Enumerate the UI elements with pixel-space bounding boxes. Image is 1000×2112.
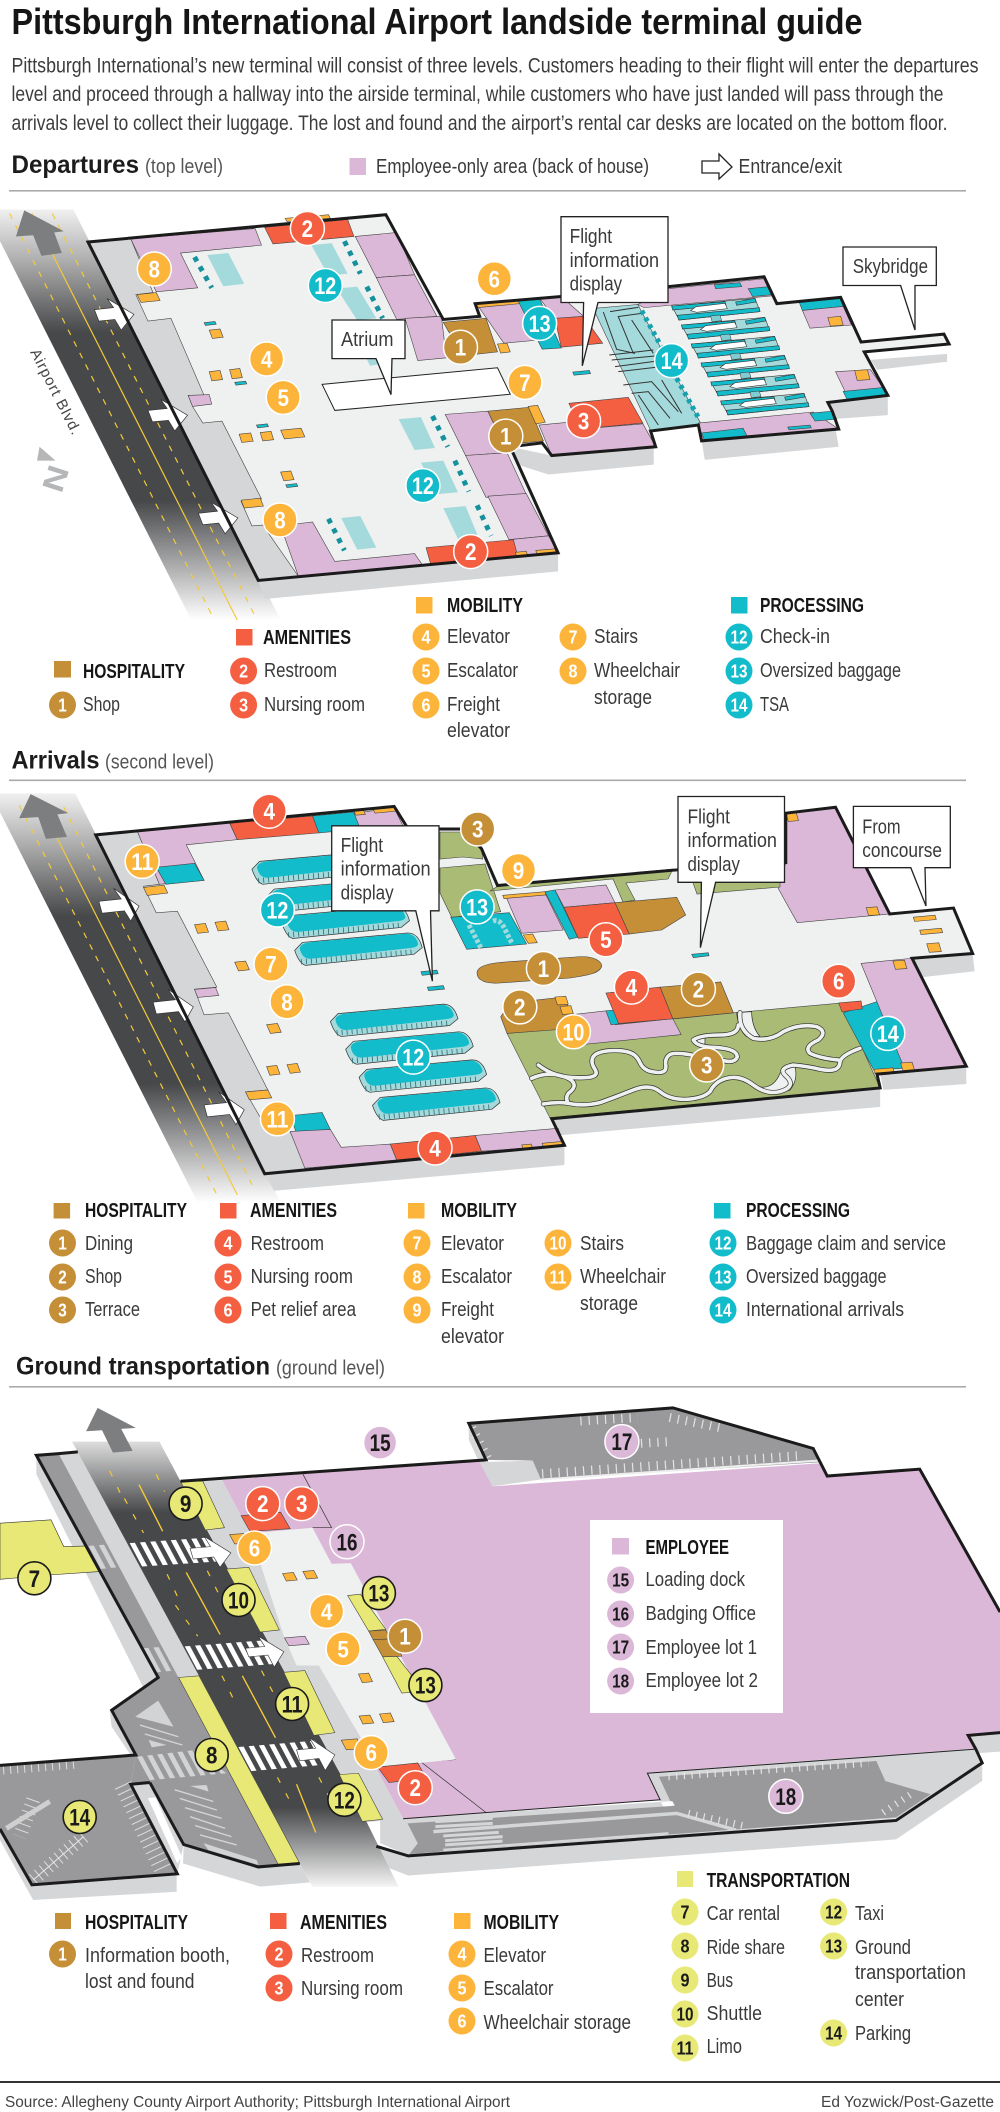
legend group: hospitality: 1: [58, 696, 67, 716]
badge: ride share: [195, 1738, 228, 1772]
key box: employee: 18: [612, 1672, 629, 1692]
legend: arrivals: [49, 1200, 946, 1348]
badge: restroom: [614, 970, 648, 1004]
legend group: hospitality: Information booth,: [85, 1945, 230, 1967]
badge: international arrivals: [871, 1016, 905, 1050]
badge: stairs: [508, 365, 542, 399]
badge: wheelchair storage: 6: [365, 1740, 377, 1767]
badge: ride share: 8: [206, 1742, 217, 1770]
badge: nursing room: 5: [600, 927, 612, 954]
callout: flight information display: [678, 796, 784, 948]
legend group: amenities: Restroom: [301, 1945, 374, 1967]
badge: stairs: 7: [519, 370, 531, 397]
legend group: transportation: 7: [680, 1902, 690, 1922]
legend group: amenities: Nursing room: [251, 1266, 353, 1288]
badge: restroom: 2: [465, 539, 476, 566]
legend group: transportation: 12: [825, 1902, 842, 1922]
callout: atrium: [332, 320, 405, 395]
legend group: transportation: 8: [680, 1936, 690, 1956]
legend group: transportation: transportation: [855, 1962, 966, 1984]
badge: car rental: [18, 1562, 51, 1595]
key box: employee: Employee lot 2: [646, 1670, 758, 1692]
source credit: Source: Allegheny County Airport Authority; Pittsburgh International Airport: [5, 2094, 511, 2111]
badge: wheelchair storage: [137, 252, 171, 286]
legend group: amenities: [214, 1200, 357, 1324]
badge: check-in: [308, 268, 342, 302]
badge: shop: 2: [514, 994, 526, 1021]
heading: arrivals: (second level): [105, 752, 214, 774]
badge: baggage claim: [396, 1040, 430, 1074]
callout: flight information display: [332, 826, 439, 981]
legend group: mobility: Stairs: [594, 626, 638, 648]
badge: elevator: 4: [321, 1599, 333, 1626]
arrivals floor plan: [0, 793, 975, 1203]
legend group: amenities: Restroom: [264, 660, 337, 682]
callout: flight information display: information: [341, 859, 431, 881]
badge: restroom: [418, 1131, 452, 1165]
badge: wheelchair storage: 6: [249, 1536, 260, 1562]
badge: escalator: 5: [337, 1636, 349, 1663]
badge: parking: [63, 1800, 96, 1834]
legend group: amenities: [230, 627, 365, 718]
badge: elevator: 7: [265, 952, 277, 979]
badge: check-in: 12: [412, 473, 434, 500]
key box: employee: 15: [612, 1570, 629, 1590]
badge: employee lot 2: [769, 1779, 803, 1813]
legend group: amenities: Restroom: [251, 1233, 324, 1255]
badge: nursing room: [589, 923, 623, 957]
key box: employee: 16: [612, 1604, 629, 1624]
legend group: amenities: 5: [224, 1268, 232, 1288]
legend group: hospitality: Shop: [85, 1266, 122, 1288]
heading: arrivals: Arrivals: [12, 746, 100, 774]
legend group: amenities: AMENITIES: [300, 1912, 387, 1934]
road label: Airport Blvd.: Airport Blvd.: [26, 346, 84, 438]
badge: ground transportation center: [409, 1669, 442, 1702]
badge: restroom: [398, 1771, 432, 1805]
callout: flight information display: Flight: [341, 835, 383, 857]
legend group: mobility: Elevator: [447, 626, 510, 648]
legend group: mobility: storage: [580, 1293, 638, 1315]
legend group: mobility: MOBILITY: [447, 595, 524, 617]
badge: freight elevator: [502, 854, 536, 888]
legend group: processing: [726, 595, 901, 718]
key: entrance/exit: Entrance/exit: [738, 156, 842, 178]
callout: flight information display: display: [341, 882, 394, 904]
badge: terrace: 3: [472, 816, 483, 844]
badge: pet relief area: [822, 964, 856, 998]
legend group: amenities: 6: [224, 1300, 232, 1320]
legend group: mobility: 6: [458, 2012, 466, 2032]
badge: shop: [503, 990, 537, 1024]
legend group: mobility: 10: [550, 1234, 566, 1254]
legend group: processing: 14: [714, 1300, 732, 1320]
ground floor plan: [0, 1408, 1000, 1900]
badge: restroom: [252, 794, 286, 828]
badge: wheelchair storage: 11: [131, 849, 153, 876]
arrivals building outline: [96, 806, 973, 1174]
badge: restroom: 2: [302, 216, 313, 243]
badge: restroom: 4: [626, 975, 638, 1002]
legend group: amenities: Nursing room: [301, 1978, 403, 2000]
key box: employee: EMPLOYEE: [646, 1537, 729, 1559]
legend group: amenities: 2: [239, 662, 248, 682]
legend group: hospitality: [49, 661, 186, 718]
legend group: mobility: [404, 1200, 666, 1348]
legend group: transportation: Bus: [707, 1970, 733, 1992]
legend group: mobility: Stairs: [580, 1233, 624, 1255]
legend group: hospitality: [49, 1912, 230, 1993]
callout: flight information display: information: [570, 250, 659, 272]
badge: employee lot 2: 18: [775, 1784, 796, 1811]
legend group: mobility: MOBILITY: [441, 1200, 518, 1222]
title: Pittsburgh International Airport landside terminal guide: [12, 1, 862, 42]
legend group: transportation: 10: [676, 2004, 694, 2024]
legend group: hospitality: Terrace: [85, 1299, 140, 1321]
callout: flight information display: [561, 217, 668, 366]
legend group: mobility: Escalator: [447, 660, 518, 682]
heading: ground transportation: Ground transportation: [16, 1352, 270, 1380]
key: employee-only area: Employee-only area (back of house): [376, 156, 649, 178]
legend group: mobility: Wheelchair: [594, 660, 680, 682]
badge: shuttle: 10: [228, 1588, 249, 1614]
key box: employee: 17: [612, 1638, 629, 1658]
badge: elevator: 4: [261, 346, 273, 374]
badge: terrace: 3: [701, 1052, 712, 1080]
legend group: mobility: Elevator: [441, 1233, 504, 1255]
legend group: transportation: Limo: [707, 2036, 742, 2058]
legend group: mobility: MOBILITY: [484, 1912, 560, 1934]
badge: terrace: [461, 812, 495, 846]
legend group: processing: 12: [730, 628, 748, 648]
badge: restroom: 4: [429, 1136, 441, 1162]
badge: restroom: 2: [409, 1775, 421, 1802]
badge: oversized baggage: [523, 306, 557, 340]
badge: loading dock: [364, 1426, 397, 1459]
callout: flight information display: display: [688, 854, 740, 876]
panel: arrivals map: [0, 793, 975, 1203]
badge: information booth: 1: [399, 1624, 411, 1651]
badge: wheelchair storage: 11: [266, 1106, 288, 1133]
badge: ground transportation center: 13: [368, 1581, 389, 1608]
central concessions and upper terrace block: [440, 832, 780, 983]
legend group: hospitality: 3: [58, 1300, 67, 1320]
badge: restroom: [454, 535, 488, 569]
legend group: hospitality: 2: [58, 1268, 67, 1288]
legend group: mobility: Escalator: [484, 1978, 554, 2000]
callout: flight information display: Flight: [688, 806, 730, 828]
legend group: mobility: 4: [422, 628, 430, 648]
badge: restroom: 4: [263, 799, 276, 826]
badge: dining: [526, 952, 560, 986]
badge: nursing room: [285, 1487, 319, 1521]
legend group: transportation: 13: [825, 1936, 842, 1956]
badge: baggage claim: [260, 893, 294, 927]
legend group: transportation: 11: [676, 2038, 694, 2058]
terrace walking paths: [532, 1012, 860, 1105]
legend group: hospitality: [49, 1200, 188, 1324]
badge: badging office: 16: [336, 1529, 358, 1556]
badge: restroom: 2: [257, 1491, 269, 1518]
legend group: mobility: Freight: [447, 694, 500, 716]
legend group: transportation: Ride share: [707, 1937, 785, 1959]
badge: ground transportation center: 13: [415, 1673, 436, 1700]
legend group: transportation: center: [855, 1989, 904, 2011]
legend group: transportation: TRANSPORTATION: [707, 1870, 850, 1892]
callout: from concourse: concourse: [862, 840, 942, 862]
legend group: amenities: 2: [274, 1944, 284, 1964]
badge: elevator: [254, 947, 288, 981]
panel: departures map: [0, 210, 949, 620]
legend group: mobility: Freight: [441, 1299, 494, 1321]
badge: loading dock: 15: [370, 1430, 391, 1457]
badge: information booth: [388, 1619, 422, 1653]
legend group: mobility: Wheelchair: [580, 1266, 666, 1288]
badge: shop: 1: [455, 335, 466, 362]
badge: baggage claim: 12: [402, 1045, 424, 1072]
heading: arrivals: [12, 746, 214, 774]
badge: escalator: [326, 1632, 360, 1666]
legend group: hospitality: Dining: [85, 1233, 133, 1255]
badge: elevator: [250, 342, 284, 376]
TSA checkpoint lanes: [603, 298, 809, 425]
legend group: processing: PROCESSING: [760, 595, 864, 617]
legend group: transportation: Taxi: [855, 1903, 884, 1925]
legend group: mobility: 9: [412, 1300, 422, 1320]
badge: shop: 1: [500, 424, 512, 451]
badge: freight elevator: 6: [489, 266, 500, 293]
legend group: hospitality: Shop: [83, 694, 120, 716]
legend group: transportation: 9: [680, 1970, 690, 1990]
byline: Ed Yozwick/Post-Gazette: [821, 2094, 994, 2111]
badge: shop: [681, 972, 715, 1006]
badge: car rental: 7: [29, 1566, 40, 1593]
badge: check-in: [406, 469, 440, 503]
legend group: amenities: AMENITIES: [250, 1200, 337, 1222]
callout: flight information display: display: [570, 274, 622, 296]
badge: restroom: [246, 1487, 280, 1521]
legend group: hospitality: 1: [58, 1234, 67, 1254]
badge: freight elevator: [477, 262, 511, 296]
badge: wheelchair storage: [260, 1102, 294, 1136]
legend group: mobility: elevator: [447, 720, 510, 742]
legend group: mobility: 8: [568, 662, 578, 682]
callout: from concourse: From: [862, 816, 901, 838]
legend group: transportation: [672, 1870, 966, 2062]
oversized baggage belts: [469, 921, 512, 948]
key box: employee: Badging Office: [646, 1603, 756, 1625]
badge: TSA: [655, 344, 689, 378]
key: entrance/exit: [702, 154, 842, 179]
badge: badging office: [330, 1525, 364, 1559]
badge: bus: 9: [180, 1491, 191, 1518]
legend group: mobility: 5: [422, 662, 430, 682]
badge: wheelchair storage: 8: [149, 256, 160, 284]
badge: shop: [489, 419, 523, 453]
legend group: processing: Baggage claim and service: [746, 1233, 946, 1255]
legend group: amenities: [266, 1912, 403, 2002]
legend group: processing: Oversized baggage: [760, 660, 901, 682]
badge: parking: 14: [69, 1804, 91, 1832]
legend group: hospitality: HOSPITALITY: [83, 661, 186, 683]
legend group: processing: TSA: [760, 694, 789, 716]
badge: taxi: 12: [334, 1787, 355, 1814]
badge: oversized baggage: 13: [529, 311, 551, 338]
legend group: mobility: Escalator: [441, 1266, 512, 1288]
callout: flight information display: information: [688, 830, 777, 852]
key box: employee: Loading dock: [646, 1569, 746, 1591]
badge: check-in: 12: [314, 273, 336, 300]
badge: oversized baggage: 13: [466, 894, 488, 921]
badge: employee lot 1: 17: [611, 1429, 632, 1456]
badge: stairs: [556, 1015, 590, 1049]
callout: flight information display: Flight: [570, 226, 612, 248]
legend group: processing: 13: [730, 662, 748, 682]
legend group: processing: Oversized baggage: [746, 1266, 886, 1288]
legend group: processing: International arrivals: [746, 1299, 904, 1321]
badge: wheelchair storage: [263, 503, 297, 537]
legend group: hospitality: HOSPITALITY: [85, 1912, 189, 1934]
badge: dining: 1: [538, 956, 549, 983]
legend group: transportation: 14: [825, 2024, 842, 2044]
callout: from concourse: [853, 806, 950, 906]
badge: oversized baggage: [460, 890, 494, 924]
badge: nursing room: 3: [296, 1491, 307, 1518]
legend group: processing: [710, 1200, 946, 1324]
legend group: mobility: 7: [568, 628, 578, 648]
departures floor plan: [0, 210, 949, 620]
badge: baggage claim: 12: [266, 898, 288, 924]
badge: wheelchair storage: [354, 1736, 388, 1770]
north marker: N: [37, 461, 76, 496]
legend group: amenities: 4: [224, 1234, 232, 1254]
legend group: mobility: [448, 1912, 631, 2034]
legend group: amenities: Nursing room: [264, 694, 365, 716]
badge: shuttle: [222, 1584, 255, 1616]
heading: ground transportation: (ground level): [276, 1358, 385, 1380]
badge: wheelchair storage: [238, 1531, 272, 1565]
legend group: mobility: storage: [594, 687, 652, 709]
legend group: mobility: 11: [550, 1268, 566, 1288]
badge: escalator: [266, 380, 300, 414]
callout: atrium: Atrium: [341, 329, 394, 351]
badge: international arrivals: 14: [877, 1021, 899, 1048]
legend group: mobility: elevator: [441, 1326, 504, 1348]
callout: skybridge: [843, 247, 936, 330]
badge: elevator: [310, 1594, 344, 1628]
legend group: hospitality: 1: [58, 1944, 67, 1964]
callout: skybridge: Skybridge: [853, 256, 928, 278]
badge: wheelchair storage: [125, 844, 159, 878]
badge: limo: [276, 1688, 309, 1720]
badge: nursing room: [567, 404, 601, 438]
legend group: mobility: Wheelchair storage: [484, 2012, 631, 2034]
legend group: amenities: 3: [274, 1978, 284, 1998]
legend group: mobility: [412, 595, 680, 742]
badge: freight elevator: 9: [513, 858, 524, 885]
legend: ground transportation: [49, 1870, 966, 2062]
badge: nursing room: 3: [578, 409, 589, 436]
badge: restroom: [290, 212, 324, 246]
legend group: transportation: Parking: [855, 2023, 911, 2045]
legend group: mobility: 7: [412, 1234, 422, 1254]
badge: shop: 2: [693, 977, 704, 1004]
badge: bus: [169, 1487, 202, 1520]
legend group: transportation: Car rental: [707, 1903, 780, 1925]
badge: escalator: [270, 985, 304, 1019]
legend group: transportation: Ground: [855, 1937, 911, 1959]
legend group: processing: 13: [714, 1268, 732, 1288]
legend group: processing: Check-in: [760, 626, 830, 648]
badge: wheelchair storage: 8: [274, 508, 286, 534]
legend group: transportation: Shuttle: [707, 2003, 762, 2025]
legend group: mobility: 8: [412, 1268, 422, 1288]
legend: departures: [49, 595, 901, 742]
intro text block: [12, 54, 978, 135]
badge: pet relief area: 6: [833, 969, 844, 996]
badge: employee lot 1: [605, 1425, 639, 1459]
legend group: amenities: 3: [239, 696, 248, 716]
badge: limo: 11: [282, 1692, 303, 1718]
heading: departures: (top level): [145, 156, 223, 178]
badge: shop: [444, 330, 478, 364]
legend group: processing: 12: [714, 1234, 732, 1254]
key box: employee: [590, 1520, 783, 1713]
legend group: processing: PROCESSING: [746, 1200, 850, 1222]
legend group: processing: 14: [730, 696, 748, 716]
heading: departures: [12, 151, 223, 179]
panel: ground transportation map: [0, 1408, 1000, 1900]
badge: escalator: 5: [277, 385, 289, 412]
heading: departures: Departures: [12, 151, 139, 179]
badge: taxi: [328, 1783, 361, 1816]
legend group: hospitality: lost and found: [85, 1971, 194, 1993]
legend group: amenities: Pet relief area: [251, 1299, 357, 1321]
legend group: mobility: Elevator: [484, 1945, 546, 1967]
badge: stairs: 10: [562, 1019, 584, 1046]
badge: TSA: 14: [661, 348, 683, 375]
legend group: amenities: AMENITIES: [263, 627, 351, 649]
badge: ground transportation center: [362, 1577, 395, 1610]
badge: escalator: 8: [281, 989, 293, 1016]
legend group: hospitality: HOSPITALITY: [85, 1200, 188, 1222]
legend group: mobility: 4: [458, 1944, 466, 1964]
legend group: mobility: 6: [422, 696, 430, 716]
legend group: mobility: 5: [458, 1978, 466, 1998]
key box: employee: Employee lot 1: [646, 1637, 757, 1659]
badge: terrace: [690, 1048, 724, 1082]
